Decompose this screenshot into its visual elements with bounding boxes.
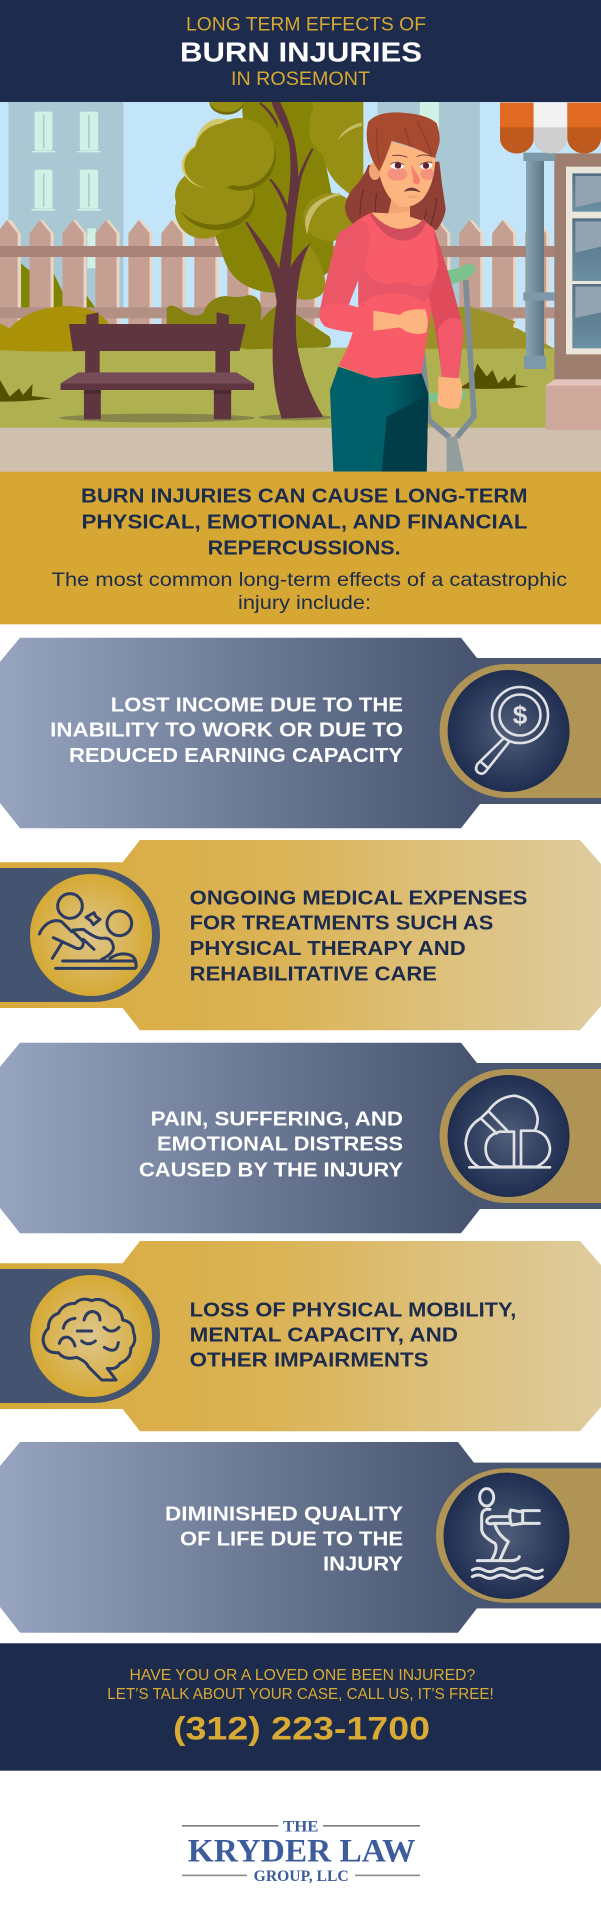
storefront (546, 153, 601, 430)
panel text: LOST INCOME DUE TO THE (111, 695, 403, 717)
intro text: The most common long-term effects of a catastrophic (52, 569, 567, 591)
call to action footer: LET’S TALK ABOUT YOUR CASE, CALL US, IT’S FREE! (107, 1686, 494, 1703)
panel text: ONGOING MEDICAL EXPENSES (190, 887, 527, 909)
panel: quality of life (0, 1442, 601, 1633)
fence (0, 220, 556, 348)
panel text: PHYSICAL THERAPY AND (190, 938, 466, 960)
hands (373, 309, 462, 409)
back bushes (21, 263, 96, 308)
intro band (0, 472, 601, 624)
panel text: OTHER IMPAIRMENTS (190, 1350, 428, 1372)
ground shadows (59, 414, 332, 422)
panel text (190, 887, 527, 986)
intro heading: REPERCUSSIONS. (208, 537, 401, 559)
intro heading: PHYSICAL, EMOTIONAL, AND FINANCIAL (82, 512, 528, 534)
panel text (165, 1504, 404, 1576)
intro text (52, 569, 567, 614)
right building (378, 102, 480, 309)
panel text: PAIN, SUFFERING, AND (151, 1109, 403, 1131)
illustration: park scene with injured woman (0, 89, 601, 473)
panel: medical expenses (0, 840, 601, 1030)
panel text: OF LIFE DUE TO THE (180, 1529, 403, 1551)
logo: The Kryder Law Group, LLC: KRYDER LAW (188, 1834, 416, 1870)
panel: pain and suffering (0, 1043, 601, 1233)
panel text: FOR TREATMENTS SUCH AS (190, 913, 493, 935)
icon: physical therapy (39, 894, 136, 968)
panel text: INJURY (323, 1554, 404, 1576)
icon: brain (43, 1299, 135, 1380)
panel text: MENTAL CAPACITY, AND (190, 1325, 458, 1347)
hair back (345, 162, 446, 233)
grass tufts (0, 363, 529, 402)
panel: lost income (0, 638, 601, 828)
awning (500, 103, 601, 153)
grass and pavement (0, 295, 601, 473)
intro text: injury include: (238, 592, 371, 614)
woman (319, 112, 463, 472)
panel text: INABILITY TO WORK OR DUE TO (50, 720, 403, 742)
panel text (139, 1109, 404, 1182)
panel text: REDUCED EARNING CAPACITY (69, 745, 404, 767)
shirt (319, 213, 463, 379)
title banner: BURN INJURIES (180, 36, 422, 67)
logo: The Kryder Law Group, LLC: GROUP, LLC (254, 1868, 349, 1885)
icon: pills (466, 1096, 550, 1167)
panel: loss of mobility (0, 1241, 601, 1431)
icon: magnifying glass with dollar sign: $ (513, 700, 528, 730)
tree (175, 89, 363, 419)
icon: magnifying glass with dollar sign (476, 687, 548, 774)
head (367, 112, 440, 207)
panel text: CAUSED BY THE INJURY (139, 1160, 404, 1182)
panel text: EMOTIONAL DISTRESS (157, 1134, 403, 1156)
phone number: (312) 223-1700 (173, 1710, 430, 1746)
logo: The Kryder Law Group, LLC (182, 1819, 420, 1885)
panel text: REHABILITATIVE CARE (190, 964, 437, 986)
panel text: DIMINISHED QUALITY (165, 1504, 404, 1526)
title banner: IN ROSEMONT (231, 69, 370, 90)
left building (8, 102, 123, 309)
intro heading: BURN INJURIES CAN CAUSE LONG-TERM (81, 486, 528, 508)
panel text (190, 1300, 516, 1372)
call to action footer (0, 1643, 601, 1771)
title banner: LONG TERM EFFECTS OF (186, 15, 426, 36)
logo: The Kryder Law Group, LLC: THE (283, 1819, 318, 1836)
intro heading (81, 486, 528, 559)
bench (61, 312, 254, 419)
panel text: LOSS OF PHYSICAL MOBILITY, (190, 1300, 516, 1322)
icon: water skier (472, 1489, 542, 1578)
drain pipe (523, 153, 555, 369)
pants (330, 367, 428, 472)
call to action footer: HAVE YOU OR A LOVED ONE BEEN INJURED? (130, 1667, 476, 1684)
title banner (0, 0, 601, 102)
crutch (422, 263, 475, 472)
panel text (50, 695, 404, 767)
